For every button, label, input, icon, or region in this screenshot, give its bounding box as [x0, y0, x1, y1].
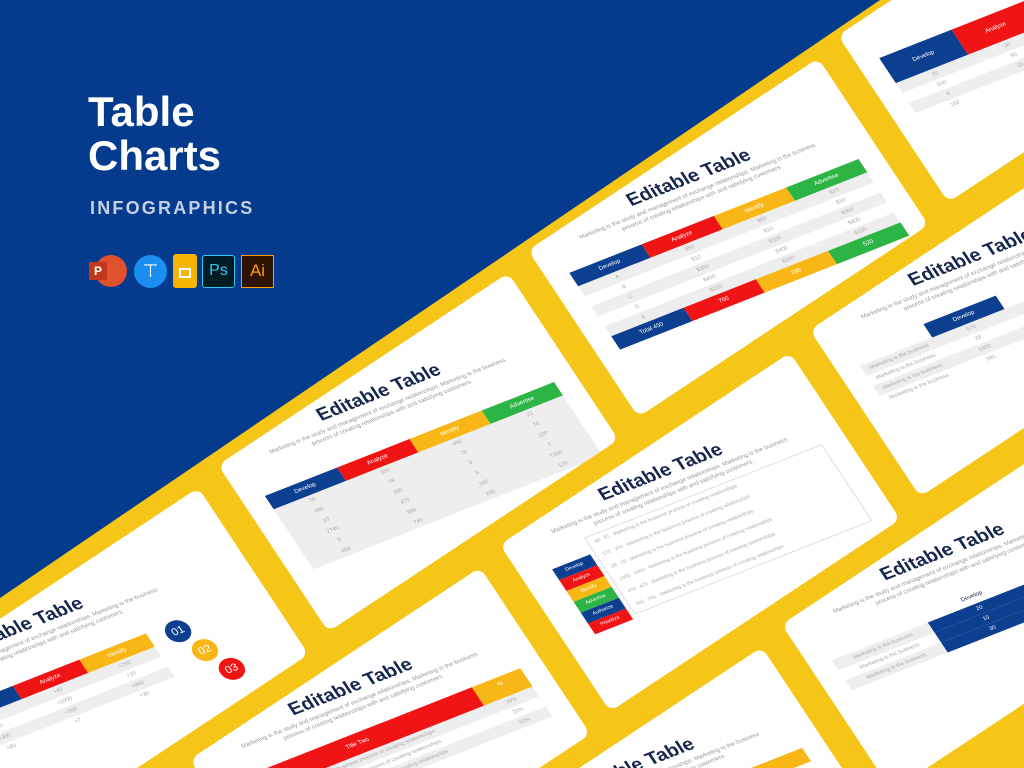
card: icons table (B): 7250 — [549, 450, 564, 459]
icon: photoshop — [202, 255, 235, 288]
card: bottom right: 30 — [988, 625, 997, 632]
card: icons table (B): Marketing is the study and management of exchange relationships. Marketing is the business process of creating relationships with and satisfying customers. — [269, 358, 507, 455]
card: total table (A): Develop — [598, 259, 622, 272]
card: numbered list (D): +860 — [130, 680, 146, 690]
card: total table (A): Total 450 — [639, 322, 665, 336]
card: bottom middle (title two): Marketing is the study and management of exchange relationships. Marketing is the business process of creating relationships with and satisfying customers. — [240, 652, 479, 750]
card: right middle: Develop — [952, 310, 976, 323]
card: top right — [838, 0, 1024, 202]
card: icons table (B): 70 — [532, 421, 541, 428]
card: total table (A): Advertise — [813, 173, 840, 187]
card: right middle — [810, 138, 1024, 497]
card: total table (A): Identify — [744, 202, 765, 214]
card: total table (A): Editable Table — [622, 145, 755, 211]
card: icons table (B): Identify — [439, 425, 461, 438]
card: total table (A): $10 — [763, 226, 775, 234]
card: numbered list (D): +7 — [73, 717, 83, 725]
card: icons table (B): 55 — [309, 496, 318, 504]
card: numbered list (D) — [0, 488, 309, 768]
card: total table (A): $10 — [835, 197, 847, 206]
icon: keynote: ⊤ — [143, 261, 158, 281]
card: icons table (B): 740 — [413, 517, 425, 526]
card: icons table (B): 78 — [388, 478, 397, 485]
card: bottom right: Editable Table — [876, 520, 1009, 585]
card: right middle: Marketing is the business — [875, 353, 937, 381]
card: numbered list (D): 03 — [223, 662, 241, 676]
card: side header table (C): Authorize — [591, 604, 615, 617]
card: icons table (B): 8 — [337, 537, 343, 543]
card: top right: 150 — [949, 100, 961, 108]
card: total table (A): $300 — [696, 264, 711, 273]
card: total table (A): $10 — [690, 254, 703, 263]
card: side header table (C) — [500, 353, 900, 711]
card: side header table (C): Prioritize — [599, 615, 621, 627]
card: icons table (B): Editable Table — [312, 360, 445, 425]
card: icons table (B): 470 — [399, 497, 411, 506]
card: icons table (B): 360 — [478, 479, 490, 487]
card: side header table (C): 45 65 Marketing is the business process of creating relationships — [593, 484, 738, 544]
card: bottom right: Develop — [960, 590, 984, 603]
card: icons table (B): 456 — [452, 439, 464, 447]
card: side header table (C): Marketing is the study and management of exchange relationships. Marketing is the business process of creating relationships with and satisfying customers. — [550, 437, 789, 535]
card: right middle: Marketing is the business — [888, 373, 950, 401]
card: bottom middle (title two): 10% — [518, 716, 532, 726]
card: icons table (B): 78 — [460, 449, 469, 457]
card: top right: Analyze — [984, 21, 1008, 34]
icons: app logos — [89, 254, 274, 288]
card: bottom small — [472, 647, 872, 768]
icon: illustrator: Ai — [250, 261, 265, 280]
title: Charts — [88, 132, 221, 179]
card: numbered list (D): Identify — [106, 647, 128, 659]
card: total table (A): B — [621, 284, 628, 290]
card: numbered list (D): 02 — [196, 643, 214, 657]
card: top right: 8 — [945, 91, 952, 97]
card: bottom middle (title two) — [190, 567, 590, 768]
card: numbered list (D): +1000 — [56, 696, 74, 706]
card: bottom right: Marketing is the business — [865, 652, 928, 681]
icon: keynote — [134, 255, 167, 288]
card: numbered list (D): +80 — [5, 743, 18, 752]
card: total table (A): $150 — [853, 227, 868, 236]
card: side header table (C): Develop — [564, 561, 585, 573]
card: total table (A): Analyze — [670, 230, 694, 243]
card: icons table (B): 120 — [557, 460, 569, 469]
card: right middle: 570 — [966, 324, 978, 332]
card: total table (A): $150 — [781, 255, 796, 265]
card: side header table (C): 28 26 Marketing is the business process of creating relationships — [610, 509, 755, 569]
card: total table (A): $800 — [847, 217, 862, 226]
card: right middle: 28 — [974, 335, 983, 342]
card: total table (A): E — [641, 314, 647, 320]
card: icons table (B): 2 — [547, 442, 553, 448]
card: top right: Develop — [912, 50, 936, 63]
card: total table (A): 520 — [862, 239, 875, 248]
card: total table (A) — [528, 58, 929, 417]
card: side header table (C): Analyze — [571, 572, 592, 584]
card: icons table (B): 560 — [379, 467, 391, 476]
card: total table (A): $100 — [768, 235, 783, 245]
card: bottom middle (title two): % — [496, 681, 505, 688]
card: total table (A): 295 — [790, 267, 803, 276]
card: bottom right: 10 — [982, 615, 991, 622]
card: numbered list (D): 01 — [169, 624, 187, 639]
card: bottom middle (title two): Editable Table — [284, 655, 417, 720]
card: total table (A): $200 — [709, 284, 724, 293]
card: icons table (B): Advertise — [509, 396, 536, 410]
card: side header table (C): Advertise — [584, 593, 608, 606]
card: total table (A): A — [614, 274, 621, 280]
card: top right: 80 — [1010, 52, 1019, 59]
card: icons table (B): 890 — [314, 506, 326, 514]
card: bottom middle (title two): Title Two — [345, 737, 371, 751]
card: numbered list (D): +250 — [117, 660, 132, 670]
card: icons table (B): 990 — [393, 487, 405, 496]
card: total table (A): $400 — [775, 245, 790, 255]
icon: photoshop: Ps — [209, 262, 228, 279]
card: total table (A): D — [634, 304, 641, 310]
icon: powerpoint: P — [94, 264, 102, 278]
card: icons table (B): 23 — [525, 411, 535, 418]
card: side header table (C): 470 470 Marketing is the business process of creating relationships — [627, 532, 777, 594]
card: icons table (B): 8 — [468, 460, 474, 466]
card: icons table (B): Develop — [293, 482, 318, 495]
card: top right: 20 — [931, 70, 940, 78]
title: Table — [88, 88, 195, 135]
card: total table (A): Marketing is the study and management of exchange relationships. Marketing is the business process of creating relationships with and satisfying customers. — [579, 143, 817, 241]
card: total table (A): 760 — [718, 296, 731, 305]
card: side header table (C): 1950 1050 Marketing is the business process of creating relationships — [618, 517, 774, 582]
card: bottom middle (title two): 25% — [511, 706, 525, 716]
card: top right: 30 — [1003, 42, 1012, 49]
card: icons table (B): Analyze — [366, 453, 390, 466]
card: side header table (C): 570 370 Marketing is the business process of creating relationships — [602, 494, 752, 557]
card: side header table (C): 591 591 Marketing is the business process of creating relationships — [635, 544, 785, 607]
card: bottom right — [782, 432, 1024, 768]
card: right middle: 1950 — [977, 343, 992, 353]
card: icons table (B): 10 — [322, 516, 331, 524]
card: top right: 500 — [936, 80, 948, 88]
card: numbered list (D): +30 — [139, 691, 151, 699]
card: icons table (B) — [218, 273, 619, 632]
card: total table (A): $50 — [756, 216, 768, 224]
icon: illustrator — [241, 255, 274, 288]
card: total table (A): $300 — [840, 207, 855, 216]
card: icons table (B): 5 — [475, 470, 481, 476]
card: side header table (C): Identify — [579, 583, 598, 594]
card: numbered list (D): +500 — [64, 706, 79, 716]
card: icons table (B): 2740 — [326, 525, 341, 535]
card: icons table (B): 990 — [406, 507, 418, 516]
card: numbered list (D): Analyze — [39, 673, 62, 686]
card: side header table (C): Editable Table — [594, 440, 727, 505]
title — [88, 88, 221, 179]
card: bottom right: 20 — [975, 605, 984, 612]
card: right middle: 591 — [986, 354, 998, 362]
card: total table (A): C — [627, 294, 634, 300]
card: numbered list (D): +40 — [52, 687, 64, 695]
card: bottom right: Marketing is the business — [852, 632, 914, 661]
card: total table (A): $400 — [702, 274, 717, 283]
card: icons table (B): 230 — [537, 430, 549, 439]
card: icons table (B): 280 — [485, 489, 497, 497]
card: bottom middle (title two): 30% — [505, 696, 519, 706]
icon: google slides — [173, 254, 197, 288]
card: numbered list (D): +10 — [125, 671, 138, 679]
card: bottom right: Marketing is the business — [859, 642, 921, 671]
card: total table (A): $10 — [828, 187, 841, 196]
card: icons table (B): 458 — [340, 546, 352, 554]
card: right middle: Marketing is the business — [868, 343, 931, 371]
card: right middle: Marketing is the business — [881, 363, 944, 391]
card: total table (A): $50 — [684, 244, 696, 253]
subtitle: INFOGRAPHICS — [90, 198, 254, 218]
icon: powerpoint — [89, 255, 127, 287]
